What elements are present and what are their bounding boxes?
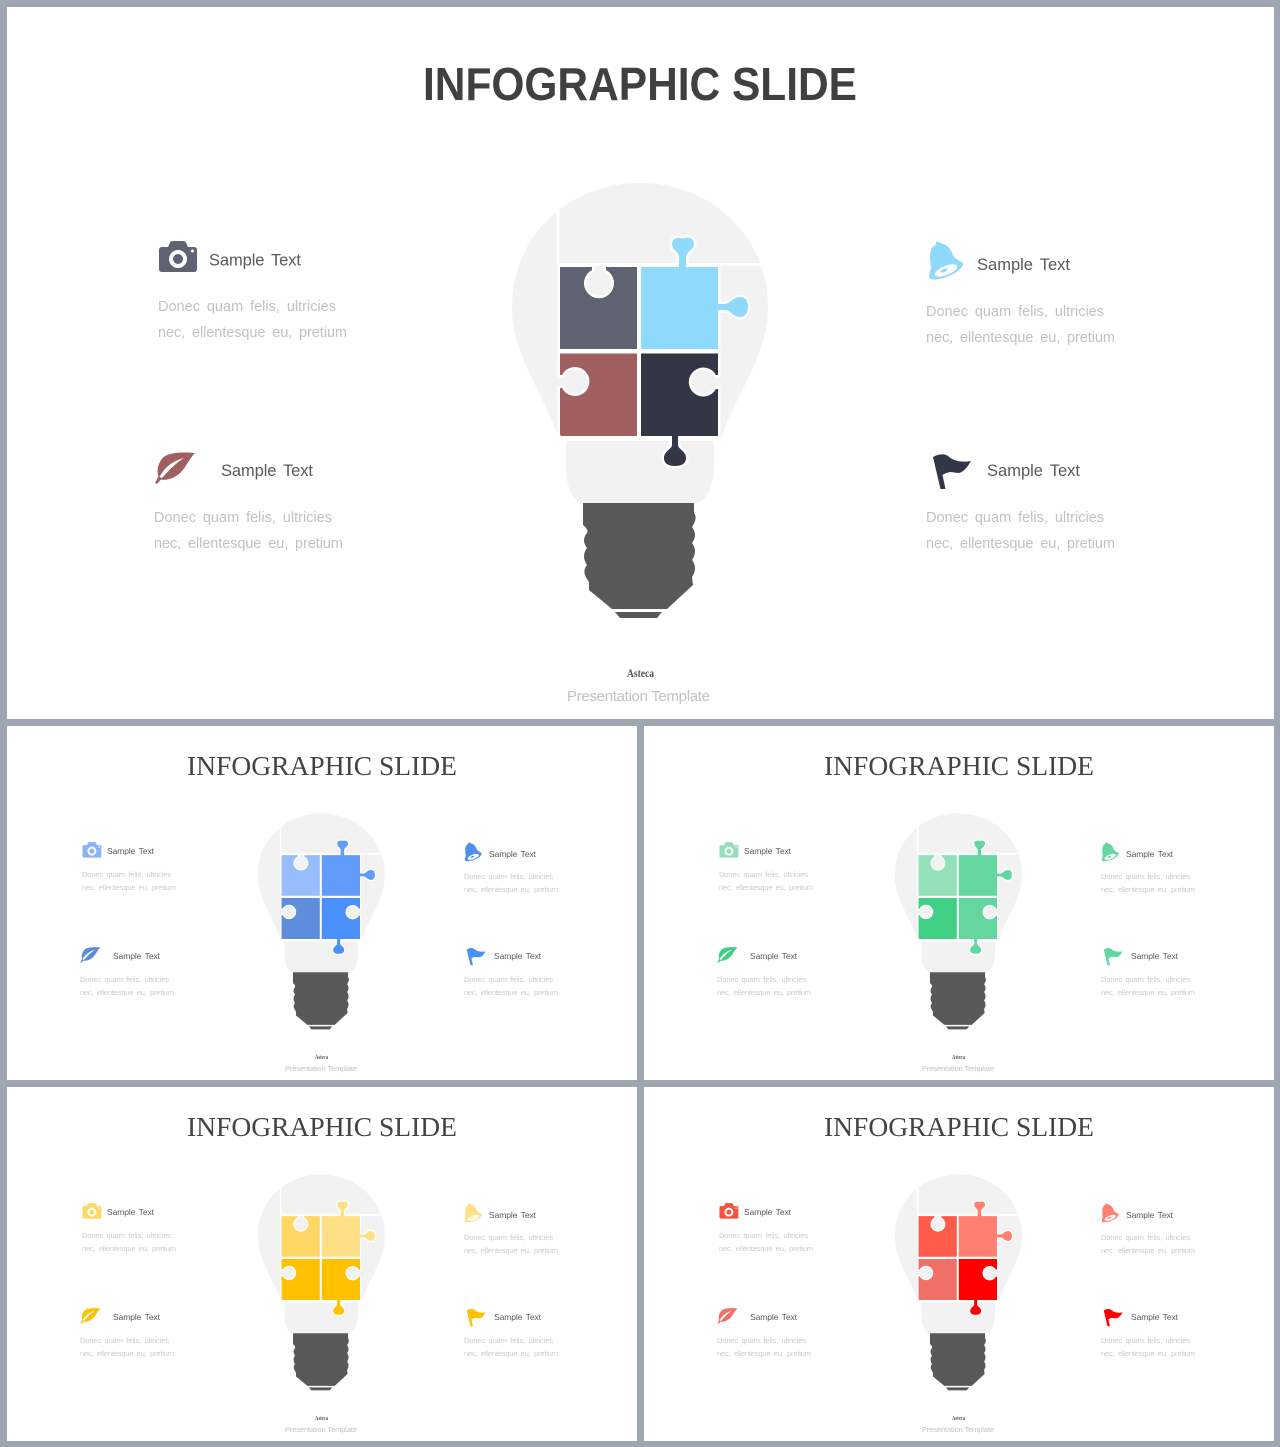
item: camera: nec, ellentesque eu, pretium	[158, 325, 347, 341]
text items: Sample Text	[744, 846, 792, 856]
title: INFOGRAPHIC SLIDE	[824, 750, 1094, 781]
panel: main slide	[7, 7, 1274, 719]
text items: Donec quam felis, ultricies	[717, 975, 806, 984]
text items: nec, ellentesque eu, pretium	[82, 883, 176, 892]
text items: Donec quam felis, ultricies	[464, 1233, 553, 1242]
item: leaf: nec, ellentesque eu, pretium	[154, 536, 343, 552]
light bulb puzzle diagram	[895, 1174, 1022, 1390]
text items: nec, ellentesque eu, pretium	[1101, 1349, 1195, 1358]
item: bell: nec, ellentesque eu, pretium	[926, 330, 1115, 346]
light bulb puzzle diagram	[512, 183, 768, 618]
text items: nec, ellentesque eu, pretium	[464, 885, 558, 894]
light bulb puzzle diagram	[895, 813, 1022, 1029]
text items: Sample Text	[107, 846, 155, 856]
text items: Donec quam felis, ultricies	[1101, 1233, 1190, 1242]
text items	[80, 1207, 558, 1358]
text items: nec, ellentesque eu, pretium	[1101, 885, 1195, 894]
text items: Donec quam felis, ultricies	[80, 1336, 169, 1345]
text items: Donec quam felis, ultricies	[82, 870, 171, 879]
panel: yellow slide	[7, 1087, 637, 1441]
text items: Donec quam felis, ultricies	[82, 1231, 171, 1240]
text items: Donec quam felis, ultricies	[80, 975, 169, 984]
text items	[717, 1207, 1195, 1358]
panel: blue slide	[7, 726, 637, 1080]
footer: Presentation Template	[922, 1425, 994, 1434]
title: INFOGRAPHIC SLIDE	[423, 58, 857, 110]
item: leaf: Sample Text	[221, 462, 313, 480]
item: camera	[158, 241, 347, 341]
item: bell	[926, 242, 1115, 346]
item: bell: Donec quam felis, ultricies	[926, 304, 1104, 320]
text items: nec, ellentesque eu, pretium	[717, 1349, 811, 1358]
title: INFOGRAPHIC SLIDE	[187, 750, 457, 781]
light bulb puzzle diagram	[258, 813, 385, 1029]
text items: Sample Text	[1131, 951, 1179, 961]
text items: Sample Text	[494, 1312, 542, 1322]
footer: Asteca	[952, 1055, 965, 1061]
light bulb puzzle diagram	[258, 1174, 385, 1390]
text items: Donec quam felis, ultricies	[719, 1231, 808, 1240]
footer	[567, 666, 710, 705]
text items: nec, ellentesque eu, pretium	[80, 1349, 174, 1358]
text items: nec, ellentesque eu, pretium	[717, 988, 811, 997]
text items: Sample Text	[750, 1312, 798, 1322]
panel: green slide	[644, 726, 1274, 1080]
title: INFOGRAPHIC SLIDE	[187, 1111, 457, 1142]
text items: nec, ellentesque eu, pretium	[1101, 988, 1195, 997]
item: flag: Sample Text	[987, 462, 1080, 480]
text items: nec, ellentesque eu, pretium	[464, 988, 558, 997]
footer	[922, 1055, 994, 1073]
panel: red slide	[644, 1087, 1274, 1441]
footer	[285, 1055, 357, 1073]
item: camera: Sample Text	[209, 252, 301, 270]
text items: Donec quam felis, ultricies	[464, 1336, 553, 1345]
text items: Donec quam felis, ultricies	[1101, 872, 1190, 881]
title: INFOGRAPHIC SLIDE	[824, 1111, 1094, 1142]
icons	[717, 842, 1123, 965]
item: leaf	[154, 452, 343, 552]
text items: Sample Text	[750, 951, 798, 961]
footer: Asteca	[315, 1416, 328, 1422]
icons	[80, 842, 486, 965]
item: bell: Sample Text	[977, 256, 1070, 274]
text items: nec, ellentesque eu, pretium	[464, 1246, 558, 1255]
text items: Donec quam felis, ultricies	[1101, 975, 1190, 984]
item: flag: Donec quam felis, ultricies	[926, 510, 1104, 526]
item: flag	[926, 454, 1115, 552]
footer: Presentation Template	[922, 1064, 994, 1073]
text items: Donec quam felis, ultricies	[464, 975, 553, 984]
text items: nec, ellentesque eu, pretium	[464, 1349, 558, 1358]
text items	[80, 846, 558, 997]
text items: nec, ellentesque eu, pretium	[719, 883, 813, 892]
text items: Sample Text	[489, 1210, 537, 1220]
text items: Donec quam felis, ultricies	[717, 1336, 806, 1345]
item: camera: Donec quam felis, ultricies	[158, 299, 336, 315]
item: leaf: Donec quam felis, ultricies	[154, 510, 332, 526]
footer	[285, 1416, 357, 1434]
text items: Sample Text	[489, 849, 537, 859]
icons	[717, 1203, 1123, 1326]
text items: Sample Text	[113, 951, 161, 961]
text items	[717, 846, 1195, 997]
footer	[922, 1416, 994, 1434]
text items: Sample Text	[107, 1207, 155, 1217]
text items: Sample Text	[494, 951, 542, 961]
text items: Donec quam felis, ultricies	[719, 870, 808, 879]
text items: nec, ellentesque eu, pretium	[80, 988, 174, 997]
text items: Sample Text	[113, 1312, 161, 1322]
text items: Donec quam felis, ultricies	[464, 872, 553, 881]
footer: Asteca	[952, 1416, 965, 1422]
text items: Sample Text	[744, 1207, 792, 1217]
item: flag: nec, ellentesque eu, pretium	[926, 536, 1115, 552]
footer: Presentation Template	[285, 1064, 357, 1073]
text items: Sample Text	[1131, 1312, 1179, 1322]
icons	[80, 1203, 486, 1326]
text items: Donec quam felis, ultricies	[1101, 1336, 1190, 1345]
text items: nec, ellentesque eu, pretium	[82, 1244, 176, 1253]
text items: Sample Text	[1126, 849, 1174, 859]
text items: nec, ellentesque eu, pretium	[719, 1244, 813, 1253]
footer: Presentation Template	[567, 688, 710, 705]
text items: nec, ellentesque eu, pretium	[1101, 1246, 1195, 1255]
footer: Asteca	[315, 1055, 328, 1061]
footer: Asteca	[627, 666, 654, 680]
text items: Sample Text	[1126, 1210, 1174, 1220]
footer: Presentation Template	[285, 1425, 357, 1434]
